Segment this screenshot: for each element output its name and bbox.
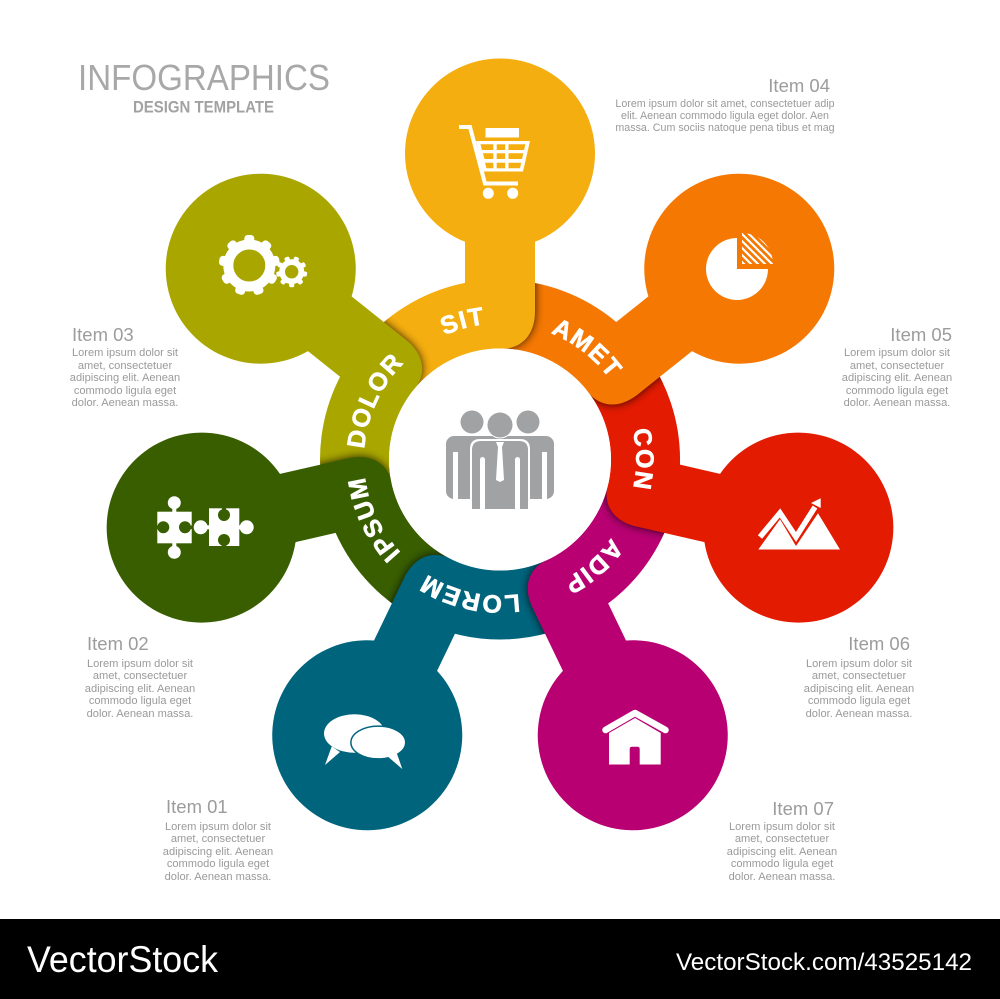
footer logo text: VectorStock <box>27 939 218 980</box>
text block: Item 05: Item 05 <box>890 324 952 345</box>
footer url: VectorStock.com/43525142 <box>676 949 972 976</box>
text block: Item 05: commodo ligula eget <box>846 385 948 397</box>
text block: Item 07: Item 07 <box>772 798 834 819</box>
label: ADIP: ADIP <box>569 538 621 592</box>
text block: Item 04: elit. Aenean commodo ligula eget dolor. Aen <box>621 110 829 122</box>
text block: Item 02: Lorem ipsum dolor sit <box>87 658 193 670</box>
text block: Item 05: dolor. Aenean massa. <box>844 397 950 409</box>
text block: Item 03: Item 03 <box>72 324 134 345</box>
text block: Item 07: amet, consectetuer <box>735 833 829 845</box>
icon: gears <box>218 235 312 296</box>
text block: Item 07 <box>727 798 837 883</box>
text block: Item 03: commodo ligula eget <box>74 385 176 397</box>
segment: CON, red, chart <box>587 376 894 623</box>
label: LOREM: LOREM <box>420 575 520 613</box>
segment: ADIP, magenta, house <box>528 484 728 830</box>
SIT stem overlapping AMET <box>500 280 535 348</box>
text block: Item 06: adipiscing elit. Aenean <box>804 683 914 695</box>
text block: Item 03: dolor. Aenean massa. <box>72 397 178 409</box>
text block: Item 06: Item 06 <box>848 633 910 654</box>
text block: Item 01: Lorem ipsum dolor sit <box>165 821 271 833</box>
segment: DOLOR, olive, gears <box>166 174 422 484</box>
text block: Item 01: Item 01 <box>166 796 228 817</box>
text block: Item 04: Lorem ipsum dolor sit amet, consectetuer adip <box>615 98 835 110</box>
footer bar <box>0 919 1000 999</box>
label: CON: CON <box>633 428 654 490</box>
centre hub with people icon <box>389 348 611 570</box>
text block: Item 05: adipiscing elit. Aenean <box>842 372 952 384</box>
label: DOLOR: DOLOR <box>346 354 404 448</box>
icon: team of people <box>446 410 554 509</box>
text block: Item 06: Lorem ipsum dolor sit <box>806 658 912 670</box>
icon: mountain trend chart <box>758 498 840 550</box>
text block: Item 01: amet, consectetuer <box>171 833 265 845</box>
icon: pie chart <box>706 233 773 300</box>
text block: Item 06 <box>804 633 914 720</box>
text block: Item 07: dolor. Aenean massa. <box>729 871 835 883</box>
text block: Item 05: amet, consectetuer <box>850 360 944 372</box>
icon: speech bubbles <box>324 714 406 769</box>
text block: Item 06: commodo ligula eget <box>808 695 910 707</box>
text block: Item 04: Item 04 <box>768 75 830 96</box>
text block: Item 02: adipiscing elit. Aenean <box>85 683 195 695</box>
text block: Item 01 <box>163 796 273 883</box>
title: INFOGRAPHICS <box>78 57 330 98</box>
text block: Item 03: amet, consectetuer <box>78 360 172 372</box>
segment: AMET, orange, pie <box>504 174 834 404</box>
text block: Item 01: dolor. Aenean massa. <box>165 871 271 883</box>
text block: Item 04: massa. Cum sociis natoque pena tibus et mag <box>615 122 835 134</box>
icon: shopping cart <box>459 127 530 199</box>
text block: Item 04 <box>615 75 835 134</box>
text block: Item 02: Item 02 <box>87 633 149 654</box>
segment: SIT, yellow, cart <box>384 58 595 390</box>
text block: Item 05: Lorem ipsum dolor sit <box>844 347 950 359</box>
text block: Item 03: Lorem ipsum dolor sit <box>72 347 178 359</box>
text block: Item 02: commodo ligula eget <box>89 695 191 707</box>
text block: Item 05 <box>842 324 952 409</box>
text block: Item 07: commodo ligula eget <box>731 858 833 870</box>
icon: puzzle pieces <box>156 496 254 559</box>
text block: Item 06: amet, consectetuer <box>812 670 906 682</box>
label: SIT: SIT <box>440 306 482 334</box>
text block: Item 02 <box>85 633 195 720</box>
subtitle: DESIGN TEMPLATE <box>133 98 274 116</box>
text block: Item 07: adipiscing elit. Aenean <box>727 846 837 858</box>
text block: Item 02: amet, consectetuer <box>93 670 187 682</box>
text block: Item 01: commodo ligula eget <box>167 858 269 870</box>
segment: IPSUM, dark green, puzzle <box>106 432 452 623</box>
segment: LOREM, teal, chat <box>272 554 548 830</box>
icon: house <box>606 713 666 764</box>
text block: Item 06: dolor. Aenean massa. <box>806 708 912 720</box>
label: IPSUM: IPSUM <box>348 478 400 564</box>
text block: Item 03: adipiscing elit. Aenean <box>70 372 180 384</box>
text block: Item 07: Lorem ipsum dolor sit <box>729 821 835 833</box>
text block: Item 03 <box>70 324 180 409</box>
text block: Item 02: dolor. Aenean massa. <box>87 708 193 720</box>
label: AMET: AMET <box>550 320 623 374</box>
text block: Item 01: adipiscing elit. Aenean <box>163 846 273 858</box>
